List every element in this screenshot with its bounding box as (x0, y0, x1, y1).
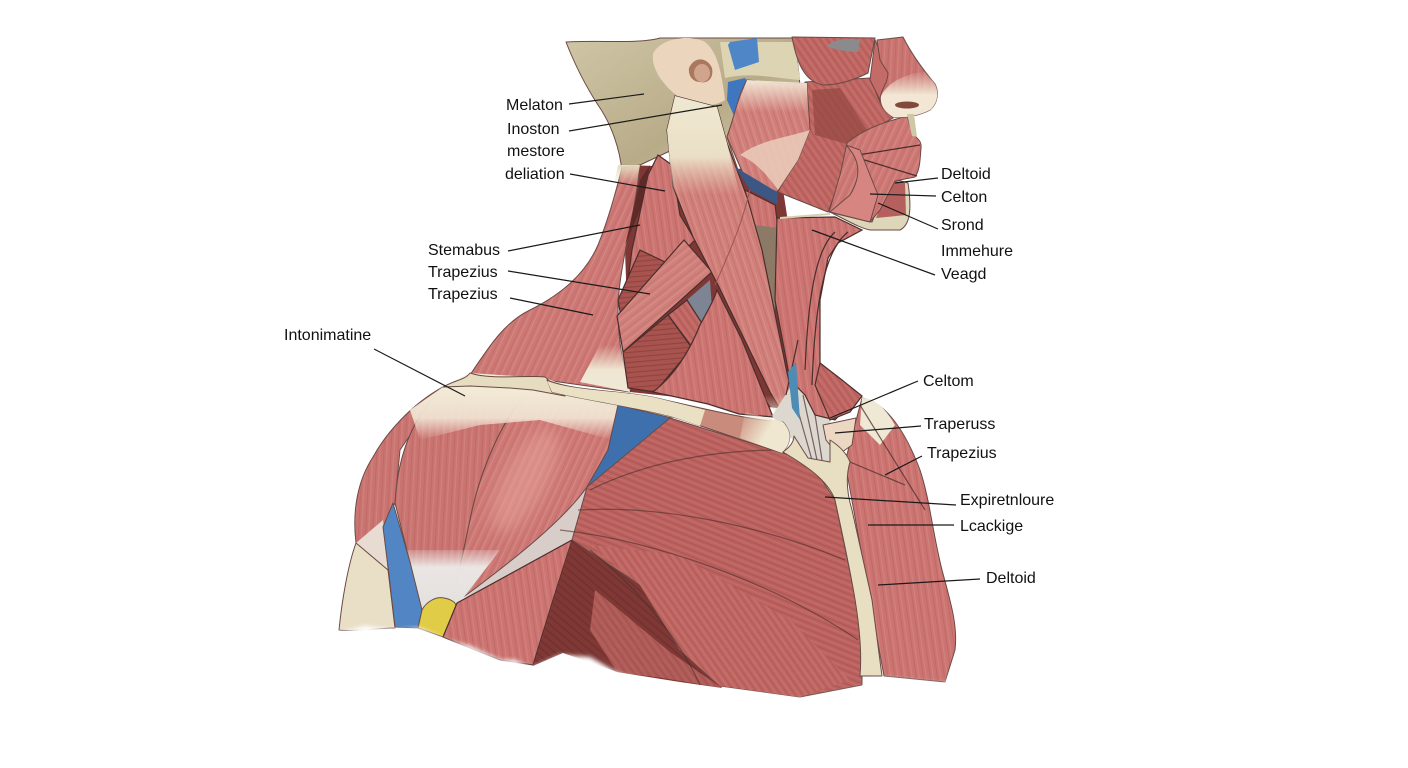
left trapezius (470, 165, 640, 392)
trapezius tendon base (580, 345, 630, 392)
cream chin (830, 178, 910, 230)
fan muscle (653, 290, 773, 417)
label: Deltoid lower (878, 570, 1036, 587)
label: deliation (505, 166, 665, 191)
masseter lower tendon (740, 130, 810, 190)
lip lines (858, 145, 920, 176)
chin muscles (876, 180, 906, 218)
trapezius muscle (470, 165, 640, 392)
label: Veagd: Veagd (941, 266, 986, 283)
label: Trapezius right (885, 445, 997, 475)
ragged white bottom edge (300, 626, 1000, 768)
label: Trapezius lower (428, 286, 593, 315)
label: Traperuss (835, 416, 995, 433)
philtrum cartilage (907, 114, 917, 137)
jaw vessel (735, 167, 778, 205)
pectoral lower fan (590, 545, 850, 697)
brown deep tissue (755, 225, 778, 310)
nose muscle (877, 37, 937, 117)
deep cheek muscles (778, 78, 893, 212)
label: Melaton (506, 94, 644, 114)
front neck muscles (772, 214, 862, 462)
label: Veagd (812, 230, 986, 283)
pale wedge under deltoid (457, 487, 587, 605)
right shoulder (815, 363, 956, 682)
layered muscle (623, 315, 692, 392)
cream cap (860, 398, 895, 445)
sternum band (783, 436, 882, 676)
blue vessel upper (728, 38, 759, 70)
neck skin and fascia (566, 38, 800, 190)
large pectoral (572, 418, 862, 697)
label: Celton: Celton (941, 189, 987, 206)
label: Trapezius lower: Trapezius (428, 286, 498, 303)
orbital muscle (792, 37, 875, 85)
middle deltoid lobe (395, 387, 533, 610)
shoulder cap tendon (410, 373, 620, 440)
right deltoid lobe (453, 390, 617, 602)
blue band (383, 503, 422, 628)
label: Celtom (830, 373, 974, 418)
muscle dividers (850, 405, 925, 510)
masseter fascia (735, 80, 808, 112)
ear lobe shape (653, 38, 725, 105)
label: mestore: mestore (507, 143, 565, 160)
pectoral dividers (560, 450, 858, 685)
arm bone (339, 543, 395, 631)
lip tendon strap (830, 145, 878, 222)
small deltoid head (823, 418, 856, 455)
muscle belly (667, 96, 818, 462)
right arm muscle (845, 398, 956, 682)
label: Intonimatine: Intonimatine (284, 327, 371, 344)
fan strands (795, 395, 822, 460)
hyoid line (780, 214, 830, 218)
buccal dark shading (812, 88, 870, 145)
label: Stemabus (428, 225, 640, 259)
label: Srond (878, 203, 984, 234)
nose tip (881, 72, 937, 117)
label: Expiretnloure: Expiretnloure (960, 492, 1054, 509)
vein line (715, 180, 752, 285)
label: Inoston: Inoston (507, 121, 559, 138)
ear (653, 38, 725, 105)
chest (443, 380, 882, 697)
muscle behind fascia (668, 300, 705, 347)
levator muscle (624, 155, 695, 310)
label: Expiretnloure (825, 492, 1054, 509)
label: deliation: deliation (505, 166, 565, 183)
side nose muscle (870, 40, 890, 100)
inner ear (694, 64, 710, 82)
label: Lcackige: Lcackige (960, 518, 1023, 535)
collar cream left (547, 381, 705, 426)
face muscles (727, 37, 937, 230)
label: Deltoid upper: Deltoid (941, 166, 991, 183)
lower tendon (762, 395, 820, 462)
dark axilla (533, 540, 722, 688)
label: Inoston (507, 105, 722, 138)
label: Celtom: Celtom (923, 373, 974, 390)
label: Deltoid upper (895, 166, 991, 183)
upper trapezius slope (815, 363, 862, 420)
blue vessel lower (727, 78, 750, 118)
eye opening (827, 39, 860, 52)
nostril (895, 102, 919, 108)
grey fascia triangle (687, 280, 712, 328)
yellow tendon (418, 598, 456, 637)
dark lines (786, 232, 848, 395)
lower left scalene (618, 250, 665, 340)
label: Melaton: Melaton (506, 97, 563, 114)
deep strap muscles (617, 155, 778, 417)
highlight (478, 418, 572, 542)
label: Srond: Srond (941, 217, 984, 234)
label: Celton (870, 189, 987, 206)
dark scalene gap (625, 165, 650, 245)
label: Deltoid lower: Deltoid (986, 570, 1036, 587)
mid strap muscle (745, 190, 778, 258)
deep neck layer (622, 165, 800, 410)
label: Trapezius right: Trapezius (927, 445, 997, 462)
outer deltoid lobe (355, 387, 443, 573)
label: Intonimatine (284, 327, 465, 396)
light fascia at top of head (720, 42, 800, 80)
collar cream end (740, 412, 790, 453)
fan tendon base (772, 380, 832, 462)
trapezius tendon top (614, 165, 640, 185)
head and neck base (566, 38, 800, 410)
label: Trapezius upper (428, 264, 650, 294)
small blue vessel (788, 362, 800, 420)
left shoulder (339, 373, 672, 637)
cream cap top (443, 373, 565, 396)
label: Traperuss: Traperuss (924, 416, 995, 433)
lower tendon fan (403, 550, 500, 610)
upper tendon (667, 96, 740, 195)
label: Trapezius upper: Trapezius (428, 264, 498, 281)
ear canal (689, 59, 712, 82)
diagonal strap muscle (617, 240, 712, 352)
lower arm muscle (443, 540, 572, 665)
fringe light (356, 520, 388, 573)
masseter (727, 80, 810, 192)
orbicularis lips (829, 116, 921, 222)
label: Immehure: Immehure (941, 243, 1013, 260)
blue triangle (587, 405, 672, 487)
label: Stemabus: Stemabus (428, 242, 500, 259)
collar tendon (547, 380, 790, 453)
lower mid muscle (590, 590, 722, 688)
sternocleidomastoid (667, 96, 820, 462)
infrahyoid muscle (775, 217, 862, 420)
